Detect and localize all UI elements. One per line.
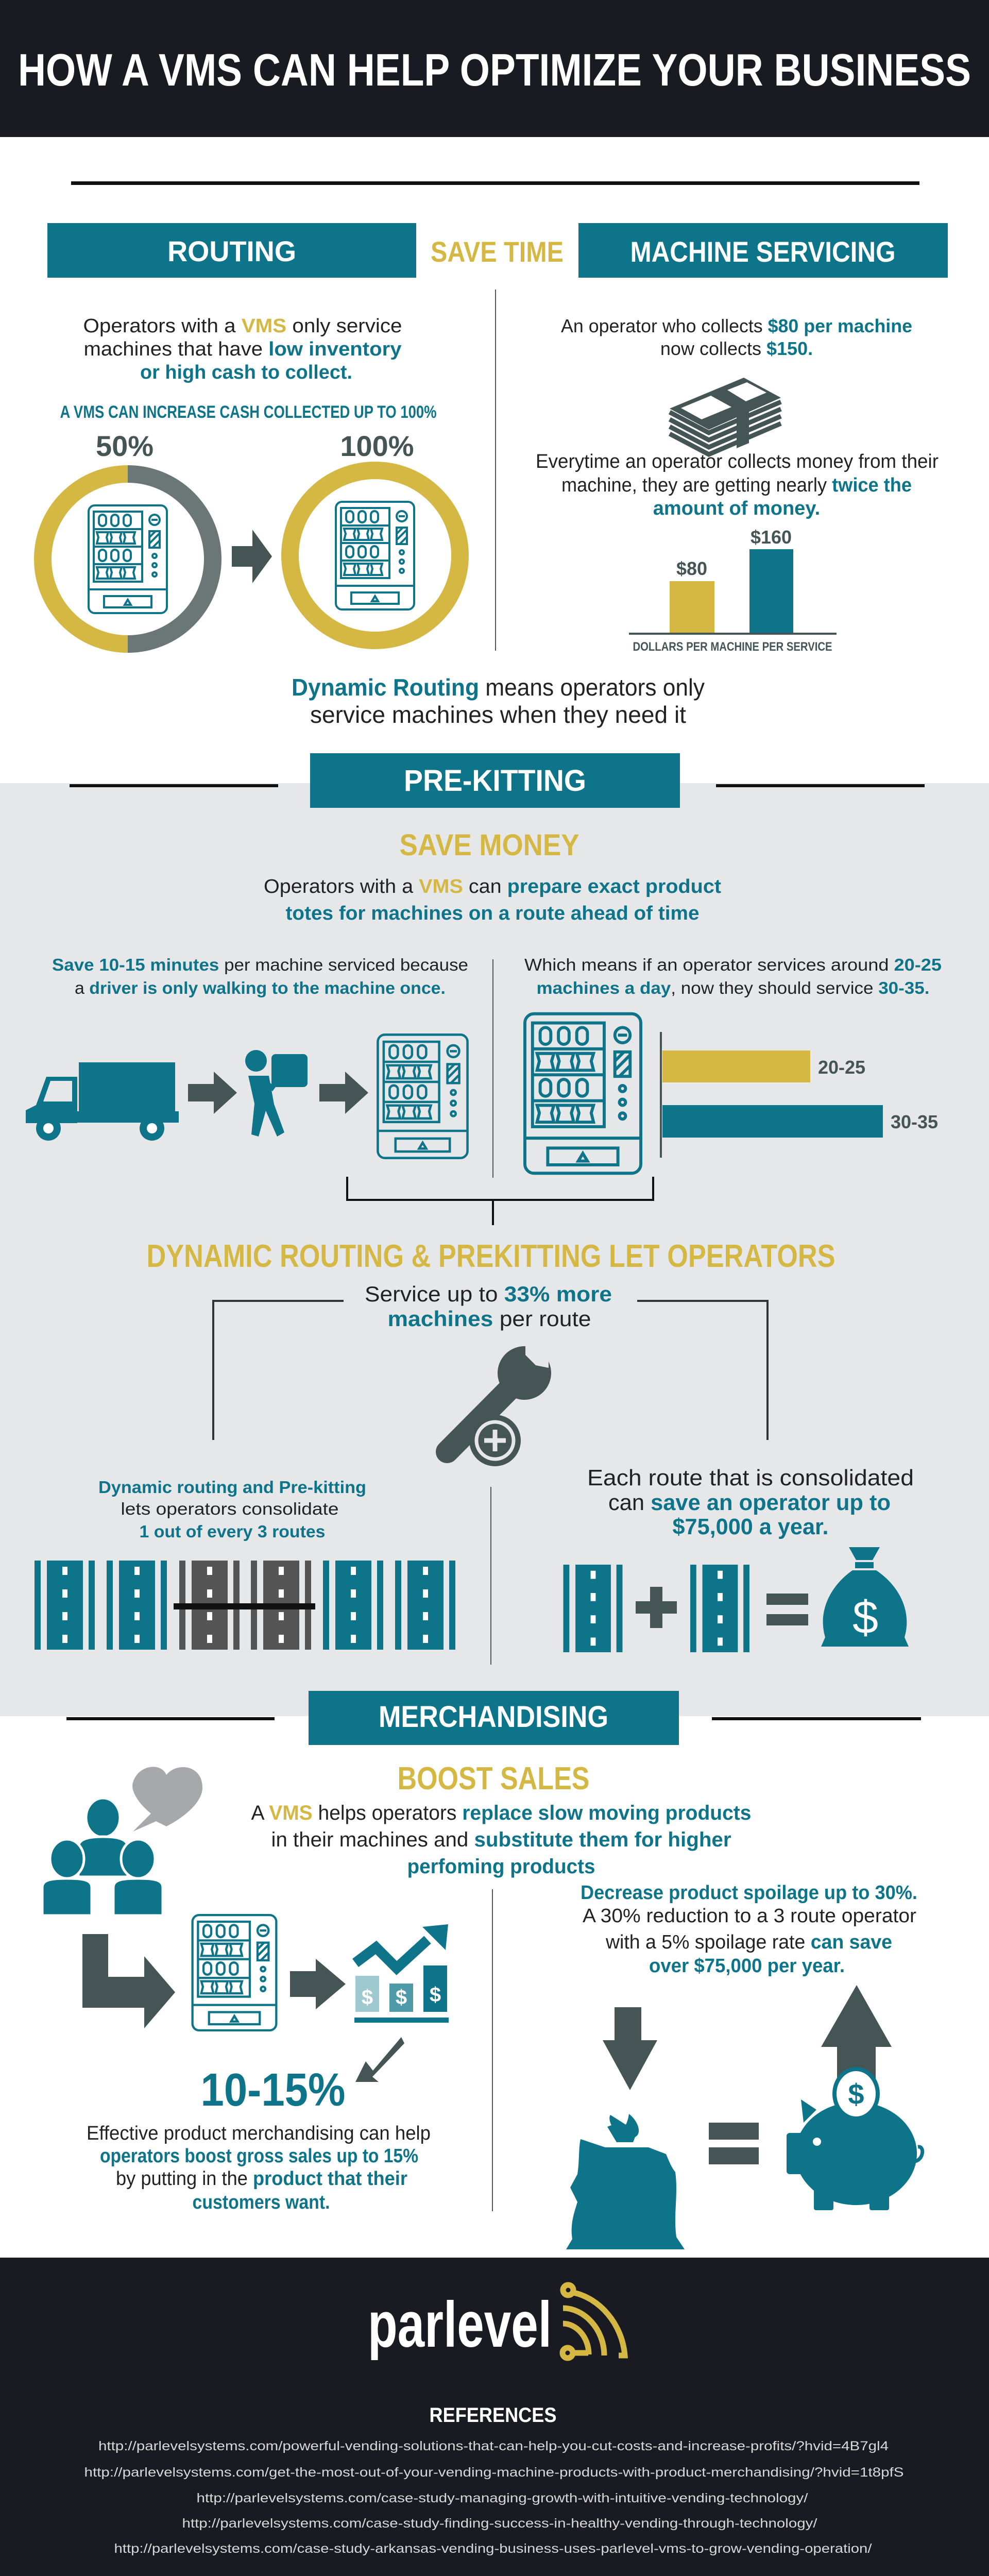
bar chart machines per day bbox=[660, 1032, 938, 1158]
arrow L bbox=[82, 1934, 175, 2028]
right text machines per day bbox=[524, 955, 942, 997]
routing text: or high cash to collect. bbox=[140, 362, 352, 383]
header banner bbox=[0, 0, 989, 137]
everytime text: Everytime an operator collects money from their bbox=[536, 451, 939, 472]
references list: http://parlevelsystems.com/case-study-arkansas-vending-business-uses-parlevel-vms-to-grow-vending-operation/ bbox=[114, 2541, 872, 2556]
bar chart bbox=[629, 527, 837, 654]
arrow bbox=[319, 1072, 368, 1114]
left text save minutes: a driver is only walking to the machine once. bbox=[75, 978, 446, 997]
heading dynamic routing & prekitting: DYNAMIC ROUTING & PREKITTING LET OPERATORS bbox=[146, 1239, 835, 1274]
left text save minutes: Save 10-15 minutes per machine serviced because bbox=[52, 955, 468, 974]
machine servicing text: An operator who collects $80 per machine bbox=[561, 315, 912, 336]
right text machines per day: Which means if an operator services around 20-25 bbox=[524, 955, 942, 974]
stat 10-15%: 10-15% bbox=[201, 2064, 345, 2116]
pre-kitting heading bbox=[310, 753, 680, 808]
merchandising result text: customers want. bbox=[193, 2192, 330, 2213]
routing text: machines that have low inventory bbox=[83, 338, 402, 360]
right text machines per day: machines a day , now they should service 30-35. bbox=[537, 978, 929, 997]
right text save $75,000: can save an operator up to bbox=[608, 1490, 891, 1515]
footer bbox=[0, 2258, 989, 2576]
icon: truck bbox=[26, 1062, 179, 1141]
logo: parlevel: parlevel bbox=[368, 2289, 552, 2361]
spoilage text: over $75,000 per year. bbox=[649, 1955, 845, 1977]
everytime text: amount of money. bbox=[653, 498, 820, 519]
service up to text: machines per route bbox=[387, 1307, 591, 1331]
icon: piggy bank: $ bbox=[848, 2078, 864, 2110]
donut 100% bbox=[290, 430, 460, 640]
arrow bbox=[232, 530, 272, 583]
boost sales: BOOST SALES bbox=[398, 1761, 589, 1797]
arrow down-left bbox=[355, 2037, 404, 2082]
service up to text: Service up to 33% more bbox=[365, 1282, 612, 1306]
save time heading: SAVE TIME bbox=[431, 235, 564, 268]
everytime text: machine, they are getting nearly twice the bbox=[561, 474, 912, 496]
icon: road + road = money bag bbox=[564, 1547, 909, 1652]
section: routing / machine servicing bbox=[43, 223, 948, 728]
arrow bbox=[188, 1072, 237, 1114]
dynamic routing text bbox=[292, 674, 705, 728]
left text save minutes bbox=[52, 955, 468, 997]
routing text bbox=[83, 315, 402, 383]
right text save $75,000: Each route that is consolidated bbox=[587, 1465, 914, 1490]
section: pre-kitting (gray panel) bbox=[0, 753, 989, 1716]
icon: sales growth chart bbox=[354, 1924, 449, 2023]
dynamic routing text: Dynamic Routing means operators only bbox=[292, 674, 705, 701]
icon: sales growth chart: $ bbox=[396, 1986, 407, 2009]
routing text: Operators with a VMS only service bbox=[83, 315, 402, 337]
donut 100%: 100% bbox=[340, 430, 414, 462]
routing heading bbox=[47, 223, 416, 278]
pre-kitting intro: totes for machines on a route ahead of time bbox=[285, 903, 700, 924]
left text consolidate routes: 1 out of every 3 routes bbox=[139, 1522, 326, 1541]
icon: wrench with plus bbox=[447, 1345, 551, 1466]
arrow bbox=[290, 1959, 346, 2009]
machine servicing heading bbox=[578, 223, 948, 278]
icon: sales growth chart: $ bbox=[362, 1986, 373, 2009]
merchandising result text: Effective product merchandising can help bbox=[87, 2123, 431, 2144]
bar chart: $160 bbox=[751, 527, 792, 548]
merchandising intro text: perfoming products bbox=[407, 1855, 595, 1878]
references list: http://parlevelsystems.com/case-study-managing-growth-with-intuitive-vending-technology/ bbox=[197, 2491, 808, 2505]
routing heading: ROUTING bbox=[167, 235, 296, 267]
merchandising result text: operators boost gross sales up to 15% bbox=[100, 2145, 418, 2167]
references list bbox=[84, 2439, 903, 2556]
subheading cash collected: A VMS CAN INCREASE CASH COLLECTED UP TO 100% bbox=[60, 402, 437, 422]
pre-kitting intro: Operators with a VMS can prepare exact product bbox=[264, 876, 721, 897]
spoilage text: Decrease product spoilage up to 30%. bbox=[581, 1882, 917, 1904]
icon: road + road = money bag: $ bbox=[852, 1592, 878, 1643]
donut 50% bbox=[43, 430, 213, 644]
merchandising heading: MERCHANDISING bbox=[379, 1700, 608, 1734]
merchandising intro text: A VMS helps operators replace slow moving products bbox=[251, 1802, 751, 1824]
service up to text bbox=[365, 1282, 612, 1331]
spoilage text bbox=[581, 1882, 917, 1977]
pre-kitting heading: PRE-KITTING bbox=[404, 764, 586, 798]
machine servicing text bbox=[561, 315, 912, 359]
references list: http://parlevelsystems.com/get-the-most-out-of-your-vending-machine-products-with-product-merchandising/?hvid=1t8pfS bbox=[84, 2465, 903, 2480]
icon: vending machine big bbox=[525, 1014, 641, 1173]
right text save $75,000: $75,000 a year. bbox=[673, 1514, 828, 1539]
references heading: REFERENCES bbox=[430, 2404, 556, 2427]
icon: trash bag bbox=[566, 2114, 685, 2249]
icon: up arrow bbox=[821, 1985, 892, 2085]
icon: vending machine bbox=[193, 1915, 276, 2030]
right text save $75,000 bbox=[587, 1465, 914, 1539]
references list: http://parlevelsystems.com/powerful-vending-solutions-that-can-help-you-cut-costs-and-increase-profits/?hvid=4B7gl4 bbox=[98, 2439, 889, 2453]
left text consolidate routes: lets operators consolidate bbox=[121, 1499, 339, 1518]
spoilage text: A 30% reduction to a 3 route operator bbox=[583, 1905, 916, 1927]
section: merchandising bbox=[42, 1691, 923, 2249]
left text consolidate routes bbox=[98, 1478, 366, 1541]
icon: piggy bank bbox=[787, 2069, 923, 2210]
icon: people bbox=[42, 1798, 163, 1916]
left text consolidate routes: Dynamic routing and Pre-kitting bbox=[98, 1478, 366, 1497]
icon: money stack bbox=[670, 378, 781, 454]
bar chart: DOLLARS PER MACHINE PER SERVICE bbox=[633, 640, 832, 654]
icon: heart speech bubble bbox=[132, 1767, 202, 1832]
icon: sales growth chart: $ bbox=[430, 1984, 441, 2006]
merchandising intro text: in their machines and substitute them for higher bbox=[271, 1828, 731, 1851]
bar chart machines per day: 20-25 bbox=[818, 1057, 865, 1078]
machine servicing text: now collects $150. bbox=[660, 338, 813, 359]
bar chart: $80 bbox=[676, 558, 707, 579]
references list: http://parlevelsystems.com/case-study-finding-success-in-healthy-vending-through-technology/ bbox=[182, 2516, 817, 2531]
everytime text bbox=[536, 451, 939, 519]
spoilage text: with a 5% spoilage rate can save bbox=[605, 1931, 892, 1953]
icon: person carrying box bbox=[245, 1050, 308, 1137]
icon: equals bbox=[709, 2123, 759, 2164]
bar chart machines per day: 30-35 bbox=[891, 1111, 938, 1132]
merchandising intro text bbox=[251, 1802, 751, 1878]
merchandising result text: by putting in the product that their bbox=[116, 2168, 407, 2190]
dynamic routing text: service machines when they need it bbox=[310, 701, 686, 728]
merchandising result text bbox=[87, 2123, 431, 2213]
save money: SAVE MONEY bbox=[400, 828, 579, 862]
donut 50%: 50% bbox=[96, 430, 154, 462]
icon: vending machine small bbox=[378, 1035, 468, 1158]
icon: down arrow bbox=[603, 2007, 657, 2090]
icon: roads consolidated bbox=[35, 1561, 455, 1650]
pre-kitting intro bbox=[264, 876, 721, 924]
merchandising heading bbox=[309, 1691, 679, 1745]
machine servicing heading: MACHINE SERVICING bbox=[630, 235, 895, 268]
